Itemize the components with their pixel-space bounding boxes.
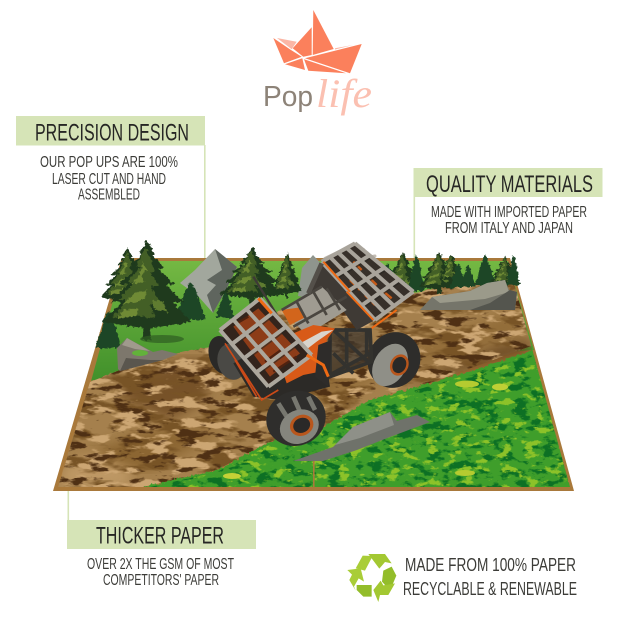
left rear wheels — [204, 333, 250, 383]
underbody shadow — [233, 343, 330, 400]
icon: recycle arrows — [347, 554, 396, 602]
rock left — [117, 338, 178, 371]
back meadow — [90, 261, 534, 385]
tree shadow — [140, 335, 184, 343]
logo: Poplife paper boat — [263, 10, 372, 116]
front rack — [220, 298, 328, 387]
trees: back centre row — [175, 247, 302, 320]
rear rack — [310, 243, 413, 330]
body text: FROM ITALY AND JAPAN — [445, 220, 573, 237]
icon: origami boat — [273, 10, 362, 73]
card base border — [53, 258, 574, 491]
foreground grass — [143, 350, 572, 490]
heading: PRECISION DESIGN — [35, 120, 189, 146]
body text: ASSEMBLED — [78, 186, 140, 204]
body text: LASER CUT AND HAND — [52, 171, 166, 188]
rear right wheel — [358, 323, 430, 397]
heading band — [414, 168, 602, 197]
body text — [87, 556, 234, 589]
panel: recycling note — [347, 554, 577, 602]
heading band — [16, 116, 205, 146]
connector line: thicker paper — [68, 490, 69, 521]
logo wordmark: Pop — [263, 81, 313, 113]
body text: OVER 2X THE GSM OF MOST — [87, 556, 234, 573]
mud ground — [58, 283, 534, 487]
centre crease — [313, 458, 315, 488]
logo: Poplife paper boat: life — [316, 71, 372, 116]
body text — [40, 154, 178, 204]
vehicle: orange and grey paper quad bike — [204, 243, 430, 454]
body text: OUR POP UPS ARE 100% — [40, 154, 178, 171]
trees: large left pine group — [95, 240, 191, 348]
heading: THICKER PAPER — [96, 522, 224, 550]
front wheel — [258, 382, 334, 454]
seat section — [282, 263, 347, 335]
rock right — [420, 280, 517, 310]
orange hood — [280, 325, 335, 387]
mountain centre — [298, 255, 325, 300]
rear rack prongs — [325, 244, 412, 320]
pop-up card scene — [53, 240, 574, 491]
connector line: precision design — [204, 145, 206, 259]
connector line: quality materials — [414, 197, 415, 259]
side frame — [225, 343, 278, 400]
panel: quality materials — [414, 168, 602, 237]
rock foreground — [293, 412, 430, 461]
chassis frame — [327, 330, 372, 377]
mountain left — [180, 249, 237, 313]
trees: back right row — [360, 252, 520, 297]
panel: precision design — [16, 116, 205, 204]
panel: thicker paper — [67, 520, 256, 589]
body text: COMPETITORS' PAPER — [103, 572, 219, 589]
recycling text — [403, 555, 577, 599]
body text — [431, 204, 587, 237]
heading band — [67, 520, 256, 549]
roll bar — [253, 277, 285, 328]
